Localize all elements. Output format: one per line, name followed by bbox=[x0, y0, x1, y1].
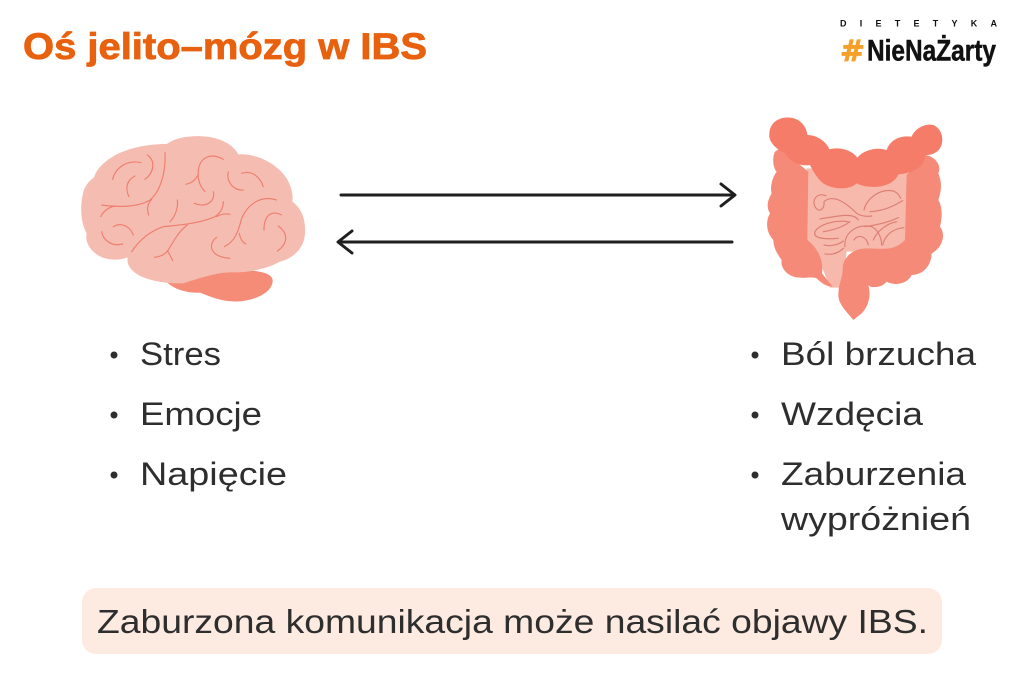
bullet: Wzdęcia bbox=[752, 412, 758, 418]
bullet: Ból brzucha bbox=[752, 352, 758, 358]
callout: Zaburzona komunikacja może nasilać objawy IBS. bbox=[97, 603, 928, 640]
icon: intestines bbox=[767, 118, 943, 320]
list: brain factors bbox=[110, 336, 287, 492]
list: gut symptoms bbox=[752, 336, 976, 537]
callout bbox=[82, 588, 942, 654]
arrow: brain to gut bbox=[341, 184, 735, 206]
logo: Dietetyka NieNaŻarty: # bbox=[840, 34, 865, 68]
brain folds bbox=[101, 153, 286, 261]
logo: Dietetyka NieNaŻarty: DIETETYKA bbox=[840, 18, 998, 28]
list: gut symptoms: wypróżnień bbox=[780, 501, 971, 537]
title: Oś jelito–mózg w IBS bbox=[23, 26, 427, 67]
logo: Dietetyka NieNaŻarty bbox=[840, 18, 998, 68]
list: gut symptoms: Wzdęcia bbox=[781, 396, 923, 432]
large intestine: ascending side bbox=[767, 148, 833, 287]
large intestine: transverse colon bbox=[769, 118, 942, 188]
brain lower lobe bbox=[167, 270, 273, 302]
list: brain factors: Stres bbox=[140, 336, 221, 372]
list: gut symptoms: Zaburzenia bbox=[781, 456, 966, 492]
icon: brain bbox=[81, 136, 305, 302]
list: brain factors: Napięcie bbox=[140, 456, 287, 492]
large intestine: descending side and rectum bbox=[838, 155, 943, 320]
logo: Dietetyka NieNaŻarty: NieNaŻarty bbox=[867, 34, 996, 68]
list: gut symptoms: Ból brzucha bbox=[781, 336, 976, 372]
list: brain factors: Emocje bbox=[140, 396, 262, 432]
small intestine background bbox=[807, 168, 910, 288]
bullet: Emocje bbox=[110, 412, 118, 418]
bullet: Napięcie bbox=[110, 472, 118, 478]
brain main shape bbox=[81, 136, 305, 283]
arrow: gut to brain bbox=[338, 231, 732, 253]
bullet: Stres bbox=[110, 352, 118, 358]
bullet: Zaburzenia wypróżnień bbox=[752, 472, 758, 478]
small intestine coils bbox=[814, 191, 904, 254]
